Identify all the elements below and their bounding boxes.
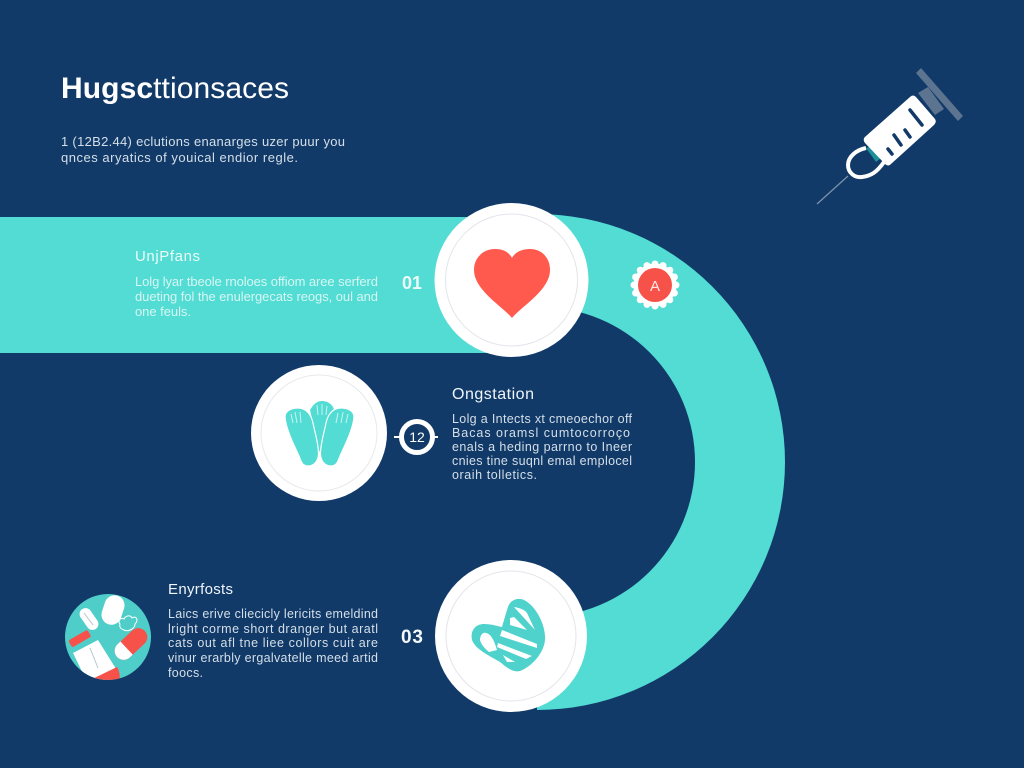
step 02 body text: Bacas oramsl cumtocorroço [452, 426, 630, 440]
step 03 body text: cats out afl tne liee collors cuit are [168, 636, 378, 650]
step 02 body text: cnies tine suqnl emal emplocel [452, 454, 632, 468]
intro text [61, 134, 345, 165]
icon: syringe [817, 68, 963, 204]
panel: step 03 [168, 581, 423, 680]
step 01 body text: one feuls. [135, 304, 191, 319]
step 02 body text: Lolg a Intects xt cmeoechor off [452, 412, 633, 426]
teal curved band [0, 214, 785, 710]
badge: A [630, 260, 680, 310]
icon: bandaged hand in white circle [435, 560, 587, 712]
title: Hugscttionsaces [61, 72, 289, 105]
icon: pills circle [65, 594, 151, 680]
step 03 body text [168, 607, 378, 680]
step 01 number: 01 [402, 273, 422, 293]
step 03 heading: Enyrfosts [168, 581, 233, 598]
step 01 body text [135, 274, 378, 319]
step 02 heading: Ongstation [452, 386, 534, 403]
step 03 body text: Laics erive cliecicly lericits emeldind [168, 607, 378, 621]
panel: step 01 [135, 248, 422, 319]
badge: 12: 12 [409, 429, 425, 445]
step 03 number: 03 [401, 627, 423, 648]
panel: step 02 [452, 386, 633, 482]
intro text: qnces aryatics of youical endior regle. [61, 150, 298, 165]
step 02 body text: enals a heding parrno to Ineer [452, 440, 632, 454]
step 01 heading: UnjPfans [135, 248, 200, 265]
step 02 body text: oraih tolletics. [452, 468, 537, 482]
step 03 body text: lright corme short dranger but aratl [168, 622, 378, 636]
intro text: 1 (12B2.44) eclutions enanarges uzer puur you [61, 134, 345, 149]
step 01 body text: dueting fol the enulergecats reogs, oul and [135, 289, 378, 304]
icon: heart in white circle [434, 203, 588, 357]
step 02 body text [452, 412, 633, 482]
badge: A: A [650, 278, 660, 295]
step 03 body text: vinur erarbly ergalvatelle meed artid [168, 651, 378, 665]
badge: 12 [394, 422, 438, 452]
icon: feet in white circle [251, 365, 387, 501]
step 01 body text: Lolg lyar tbeole rnoloes offiom aree serferd [135, 274, 378, 289]
step 03 body text: foocs. [168, 666, 203, 680]
